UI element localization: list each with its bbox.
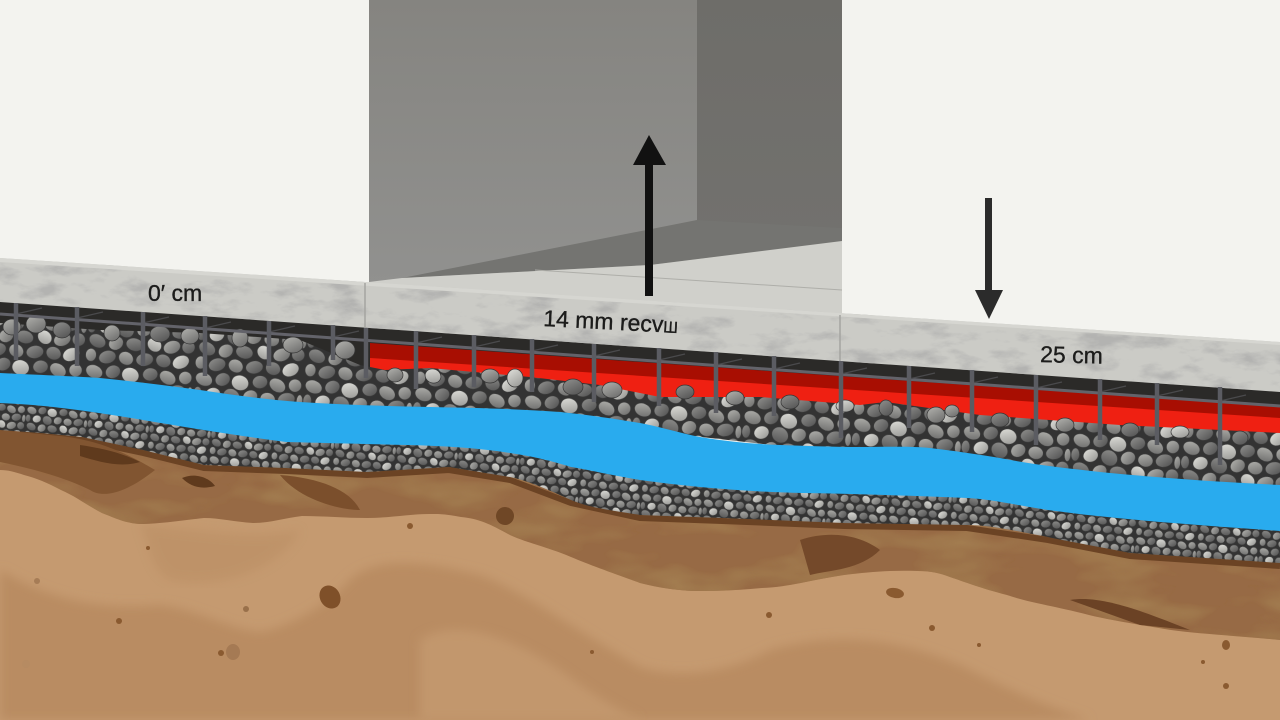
vertical rebars (16, 303, 1220, 465)
sand subsoil (0, 425, 1280, 720)
brown soil layer (0, 425, 1280, 640)
label: 14 mm recv: 14 mm recvШ (543, 305, 679, 338)
lighter sand patch (140, 524, 300, 583)
dark void under slab (0, 300, 1280, 440)
dark soil band under gravel (0, 433, 1280, 566)
lower gravel layer (0, 398, 1280, 563)
arrow down (975, 198, 1003, 319)
upper gravel fill (0, 315, 1280, 495)
arrow up (633, 135, 666, 296)
background wall left (0, 0, 370, 285)
background wall right (842, 0, 1280, 343)
blue waterproof membrane (0, 373, 1280, 531)
concrete slab (0, 258, 1280, 392)
slab joints (364, 283, 366, 328)
reinforcement rebar grid (0, 303, 1280, 465)
slab top highlight (0, 258, 1280, 345)
label: 25 cm: 25 cm (1040, 341, 1103, 369)
interior recess: grey walls and floor (369, 0, 843, 320)
darker lower sand (0, 563, 1090, 720)
red insulation layer (370, 343, 1280, 450)
label: 0 cm: 0′ cm (148, 280, 202, 306)
pebbles in sand (22, 523, 1230, 689)
edge stones along top of gravel (3, 315, 1248, 445)
horizontal rebar (0, 314, 1280, 406)
stirrup ties (16, 308, 1246, 401)
dark topsoil patches (0, 430, 155, 494)
